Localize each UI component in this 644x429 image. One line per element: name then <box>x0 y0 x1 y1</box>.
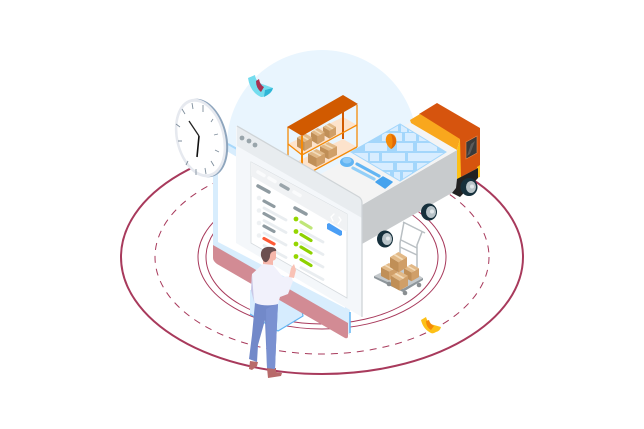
map pin <box>386 134 396 149</box>
monitor <box>213 126 362 338</box>
shelf roof <box>287 95 358 136</box>
boxes lower shelf <box>308 142 337 167</box>
shelf with boxes <box>287 95 358 177</box>
head <box>265 249 276 261</box>
torso and arm <box>251 264 293 305</box>
shoes <box>249 361 258 370</box>
inner panel <box>251 162 347 298</box>
browser window <box>236 126 362 317</box>
window dots <box>240 136 257 147</box>
cart boxes <box>381 252 419 291</box>
orbit rings <box>120 168 524 375</box>
truck cab window <box>466 136 477 159</box>
monitor pink base <box>213 245 348 338</box>
hair <box>261 247 276 262</box>
truck cab front <box>459 129 480 178</box>
monitor screen frame <box>213 140 350 335</box>
boxes upper shelf <box>297 123 336 151</box>
truck cab roof <box>419 103 480 140</box>
blue button <box>327 223 342 236</box>
map controls <box>340 157 392 188</box>
person <box>249 247 296 378</box>
legs <box>249 303 278 369</box>
list table <box>257 172 341 280</box>
map on truck roof <box>351 124 446 181</box>
hand cart with boxes <box>374 222 425 295</box>
truck cab stripe <box>410 114 460 150</box>
truck roof <box>300 122 457 205</box>
clock hands <box>189 121 199 136</box>
clock <box>167 93 236 183</box>
pager chevrons <box>331 214 341 224</box>
monitor stand <box>250 290 303 331</box>
icon: cyan phone handset <box>248 75 273 97</box>
neck <box>263 258 273 265</box>
icon: yellow phone handset <box>421 317 441 333</box>
hand <box>289 264 296 278</box>
background circle <box>227 50 417 240</box>
truck side <box>362 150 457 244</box>
browser header <box>237 126 362 218</box>
truck wheels <box>377 178 478 248</box>
truck chassis <box>452 168 478 197</box>
clock ticks <box>176 103 219 175</box>
truck <box>322 103 480 248</box>
illustration: warehouse logistics dashboard <box>120 50 524 378</box>
